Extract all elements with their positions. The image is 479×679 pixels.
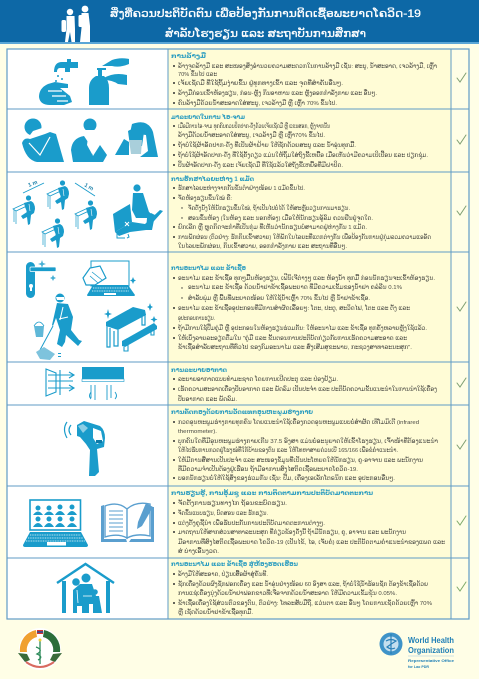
section text: distancing: ໃນໄລຍະພັກຜ່ອນ, ກິນເຂົ້າສວາຍ, ອອກກຳລັງກາຍ ແລະ ສະຖານທີ່ອື່ນໆ. (178, 242, 347, 250)
icon: laptop video meeting (23, 500, 88, 547)
section text: hand washing: ເຈ້ຍເຊັດມື ທີ່ໃຊ້ຖິ້ມງ່າຍຂຶ້ນ ຢູ່ທຸກທາງເຂົ້າ ແລະ ຈຸດທີ່ສຳຄັນອື່ນໆ. (178, 80, 343, 87)
section text: cough etiquette (171, 113, 428, 169)
section text: cough etiquette: ປິ້ນຜ້າອັດປາກ-ດັງ ແລະ ເຈ້ຍເຊັດມື ທີ່ໃຊ້ແລ້ວໃສ່ຖັງຂີ້ເຫຍື້ອທີ່ມີຝາປິດ. (178, 161, 343, 169)
icon: table and bench (104, 303, 158, 351)
section text: home: ການອະນາໄມ ແລະ ຂ້າເຊື້ອ ສູ່ຫ້ອງຮອດເຮືອນ (171, 559, 298, 569)
section text: ventilation (171, 367, 437, 403)
section text: screening: ໃຫ້ໄປຮັບການກວດຢູ່ໂຮງໝໍທີ່ໃກ້ບ້ານຂອງຕົນ ແລະ ໃຫ້ໂທຫາສາຍດ່ວນເບີ 165/166 ເພື່ອຂໍຄຳແນະນຳ. (178, 446, 398, 454)
panel: learning and monitoring (23, 488, 466, 555)
section text: home: ຊັກເຄື່ອງດ້ວຍຜົງຊັກຟອກເຄື່ອງ ແລະ ນ້ຳອຸ່ນຢ່າງໜ້ອຍ 60 ອົງສາ ແລະ, ຖ້າບໍ່ໃຊ້ນ້ຳຮ້ອນຊັກ ຕ້ອງຂ້າເຊື້ອດ້ວຍ (178, 581, 428, 588)
check mark (457, 206, 466, 215)
section text: distancing: ຈັດຕັ່ງນັ່ງໃຫ້ນັກຮຽນຂຶ້ນໃໝ່, ຖ້າເປັນໄປບໍ່ໄດ້ ໃຫ້ສະຫຼັບວຽນການມາຮຽນ. (188, 204, 350, 212)
icon: WHO emblem (380, 632, 402, 656)
section text: screening: ທີ່ມີຄວາມຈຳເປັນຕ້ອງຢູ່ເຮືອນ ຖ້າມີອາການສົງໄສຕິດເຊື້ອພະຍາດໂຄວິດ-19. (178, 465, 358, 473)
section text: screening: ກວດອຸນຫະພູມຮ່າງກາຍທຸກຄົນ ໂດຍແນະນຳໃຊ້ເຄື່ອງກວດອຸນຫະພູມແບບບໍ່ສຳຜັດ ເທີໂມມິເຕີ (infrared (178, 419, 419, 426)
section text: hand washing (171, 51, 437, 107)
panel: clean at home (57, 559, 466, 616)
section text: cough etiquette: ລ້າງມືດ້ວຍນ້ຳສະອາດໃສ່ສະບູ, ເຈວລ້າງມື ຫຼື ເຫຼົ້າ70% ຂຶ້ນໄປ. (178, 131, 325, 139)
panel: physical distancing (13, 174, 466, 250)
panel: cough and sneeze etiquette (22, 113, 466, 169)
WHO wordmark (408, 635, 454, 669)
section text: cleaning: ອຸປະກອນການຮຽນ. (178, 316, 215, 322)
section text: ventilation: ປັບອາກາດ ແລະ ພັດລົມ. (178, 395, 237, 403)
section text: learning: ຈັດຕັ້ງການຮຽນທາງໄກ ຖ້ອນຂະບົດຮຽນ. (178, 499, 287, 507)
section text: learning: ແຕ່ງຕັ້ງຄູຊີ້ນຳ ເພື່ອຮັບປະກັນການປະຕິບັດມາດຕະການຕ່າງໆ. (178, 520, 325, 527)
icon: coughing into elbow (22, 118, 64, 162)
section text: learning: ມີອາການທີ່ສົງໄສຕິດເຊື້ອພະຍາດ ໂຄວິດ-19 (ເປັນໄຂ້, ໄອ, ເຈັບຄໍ) ແລະ ປະຕິບັດຕາມຄຳແນະນຳຂອງແພດ ແລະ (178, 538, 445, 546)
check mark (457, 135, 466, 144)
section text: hand washing: ລ້າງຈຸດລ້າງມື ແລະ ສະໜອງສິ່ງອຳນວຍຄວາມສະດວກໃນການລ້າງມື ເຊັ່ນ: ສະບູ, ນ້ຳສະອາດ, ເຈວລ້າງມື, ເຫຼົ້າ (178, 63, 437, 70)
section text: distancing: ການພັກຜ່ອນ (ຕົວຢ່າງ: ຮັກກິນເຂົ້າສວາຍ) ໃຫ້ພັກໃນໄລຍະທີ່ແຕກຕ່າງກັນ ເພື່ອປ້ອງກັນການຢູ່ກຸ່ມລວມຄວາມແອອັດ (178, 233, 431, 241)
section text: distancing: ສອນຂຶ້ນຫ້ອງ (ໃນຫ້ອງ ແລະ ນອກຫ້ອງ) ເມື່ອໃຫ້ນັກຮຽນອູ້ລົມ ຄວນຢືນຢູ່ຈຸດໃດ. (188, 215, 373, 222)
icon: person on distanced bench (113, 184, 163, 238)
section text: cleaning: ຖ້າມີການໃຊ້ປື້ມຄູ່ມື ຫຼື ອຸປະກອນໃນຫ້ອງຮຽນຮ່ວມກັນ: ໃຫ້ອະນາໄມ ແລະ ຂ້າເຊື້ອ ທຸກຄັ້ງຫລາຍຫຼັງໃຊ້ແລ້ວ. (178, 324, 427, 332)
section text: home: ລ້າງມືໃຫ້ສະອາດ, ປ່ຽນເສື້ອຜ້າສູ່ຄັນທີ. (178, 571, 268, 578)
section text: cleaning: ໃຫ້ເບິ່ງລາຍລະອຽດຕື່ມໃນ "ຄູ່ມື ແລະ ຂັ້ນຕອນການປະຕິບັດກ່ຽວກັບການເຮັດຄວາມສະອາດ ແລະ (178, 335, 407, 342)
WHO wordmark: World Health (408, 635, 454, 645)
icon: spaced student desks: 1 m (28, 180, 39, 189)
section text: cleaning: ອະນາໄມ ແລະ ຂ້າເຊື້ອອຸປະກອນທີ່ມີການສຳຜັດເລື້ອຍໆ: ໂຕະ, ປະຕູ, ສະວິດໄຟ, ໂຕະ ແລະ ຕັ່ງ ແລະ (178, 304, 410, 312)
icon: spaced student desks: 1 m (83, 183, 94, 193)
section text: distancing: ຈັດຫ້ອງຮຽນຂຶ້ນໃໝ່ ຄື: (178, 195, 232, 202)
icon: person adjusting mask (115, 122, 158, 157)
check mark (457, 73, 466, 82)
logo: World Health Organization (380, 632, 454, 669)
section text: cleaning (171, 263, 435, 351)
icon: window vent with airflow (46, 369, 74, 396)
section text: cough etiquette: ມາລະຍາດໃນການ ໄອ-ຈາມ (171, 113, 245, 121)
check mark (457, 378, 466, 387)
panel: cleaning and disinfection (26, 260, 466, 360)
check mark (457, 582, 466, 591)
logo: Lao Ministry of Health emblem (18, 628, 62, 670)
section text: distancing: ຮັກສາໄລຍະຫ່າງຈາກກັນຂັ້ນຕ່ຳຢ່າງໜ້ອຍ 1 ແມັດຂຶ້ນໄປ. (178, 184, 305, 192)
WHO wordmark: for Lao PDR (408, 665, 429, 669)
icon: soap dispenser and hands (89, 58, 129, 105)
icon: air conditioner (82, 367, 124, 400)
icon: infrared thermometer (64, 421, 105, 476)
section text: ventilation: ລະບາຍອາກາດແບບທຳມະຊາດ ໂດຍການເປີດປະຕູ ແລະ ປ່ອງຢ້ຽມ. (178, 375, 338, 383)
section text: learning (171, 488, 445, 555)
section text: home: ການແຊ່ເຄື່ອງນຸ່ງດ້ວຍນ້ຳຢາຟອກຂາວທີ່ເຈືອຈາກດ້ວຍນ້ຳສະອາດ ໃຫ້ມີຄວາມເຂັ້ມຂຸ້ນ 0.05%. (178, 590, 397, 597)
section text: learning: ການຮຽນຮູ້, ການອຸ້ມຊູ ແລະ ການຕິດຕາມການປະຕິບັດມາດຕະການ (171, 488, 374, 499)
check mark (457, 302, 466, 311)
section text: home (171, 559, 432, 616)
section text: cleaning: ອະນາໄມ ແລະ ຂ້າເຊື້ອ ທຸກໆມື້ນຫ້ອງຮຽນ, ເຟີນິເຈີຕ່າງໆ ແລະ ຫ້ອງນ້ຳ ທຸກມື້ ກ່ອນນັກຮຽນຈະເຂົ້າຫ້ອງຮຽນ. (178, 274, 435, 282)
section text: learning: ມາດຖານໃຫ້ສາກສ່ວນສາທາລະນະສຸກ ທີ່ກ່ຽວຂ້ອງດັ່ງນີ້ ຖ້າມີນັກຮຽນ, ຄູ, ອາຈານ ແລະ ພະນັກງານ (178, 529, 406, 536)
icon: family in house (57, 564, 114, 613)
title (110, 7, 421, 40)
section text: screening: ໃຫ້ມີການສື່ສານເປັນປະຈຳ ແລະ ສະໜອງຂໍ້ມູນທີ່ເປັນປະໂຫຍດໃຫ້ນັກຮຽນ, ຄູ-ອາຈານ ແລະ ພະນັກງານ (178, 456, 423, 464)
icon: person mopping floor (34, 294, 82, 360)
icon: tap and washing hands (39, 59, 78, 105)
section text: home: ຂ້າເຊື້ອເຄື່ອງໃຊ້ສ່ວນຕົວຂອງຕົນ, ຕົວຢ່າງ: ໂທລະສັບມືຖື, ແວ່ນຕາ ແລະ ອື່ນໆ ໂດຍການເຊັດດ້ວຍເຫຼົ້າ 70% (178, 600, 432, 607)
panel: temperature screening (64, 407, 466, 482)
section text: hand washing: ຄົນລ້າງມືດ້ວຍນ້ຳສະອາດໃສ່ສະບູ, ເຈວລ້າງມື ຫຼື ເຫຼົ້າ 70% ຂຶ້ນໄປ. (178, 99, 337, 107)
section text: screening: thermometer). (178, 429, 217, 435)
WHO wordmark: Organization (408, 645, 454, 655)
title: ສິ່ງທີ່ຄວນປະຕິບັດຕົນ ເພື່ອປ້ອງກັນການຕິດເຊື້ອພະຍາດໂຄວິດ-19 (110, 7, 421, 20)
icon: open book and pencil (101, 503, 154, 542)
section text: cough etiquette: ຖ້າບໍ່ໃຊ້ຜ້າອັດປາກ-ດັງ ທີ່ໃຊ້ຄັ້ງດຽວ ແມ່ນໃຫ້ຖິ້ມໃສ່ຖົງຂີ້ເຫຍື້ອ ເມື່ອເຫັນວ່າມີຄວາມເປິເປື້ອນ ແລະ ປຽກຊຸ່ມ. (178, 151, 428, 160)
section text: screening: ການຄັດກອງດ້ວຍການວັດແທກອຸນຫະພູມຮ່າງກາຍ (171, 407, 313, 417)
section text: cough etiquette: ເມື່ອມີການໄອ-ຈາມ ທຸກຄົນຄວນປິດປາກ-ດັງດ້ວຍເຈ້ຍເຊັດມື ຫຼື ແຂນສອກ, ຫຼັງຈາກນັ້ນ (178, 122, 330, 130)
section text: hand washing: ລ້າງມືກ່ອນເຂົ້າຫ້ອງຮຽນ, ກ່ອນ-ຫຼັງ ກິນອາຫານ ແລະ ຫຼັງອອກກຳລັງກາຍ ແລະ ອື່ນໆ. (178, 90, 377, 97)
WHO wordmark: Representative Office (408, 659, 454, 663)
panel: ventilation (46, 367, 466, 403)
section text: distancing (171, 174, 431, 250)
section text: cleaning: ຂ້າເຊື້ອສຳລັບສະຖານທີ່ທົ່ວໄປ ຂອງກົມອະນາໄມ ແລະ ສົ່ງເສີມສຸຂະພາບ, ກະຊວງສາທາລະນະສຸກ". (178, 343, 412, 351)
section text: screening: ບຸກຄົນໃດທີ່ມີອຸນຫະພູມຮ່າງກາຍເກີນ 37.5 ອົງສາ ແມ່ນບໍ່ອະນຸຍາດໃຫ້ເຂົ້າໂຮງຮຽນ, ເຈົ້າໜ້າທີ່ຕ້ອງແນະນຳ (178, 438, 438, 445)
section text: distancing: ການຮັກສາໄລຍະຫ່າງ 1 ແມັດ (171, 174, 254, 183)
section text: learning: ສ່ ບ່າງເອື້ນງວດ. (178, 548, 219, 555)
section text: cough etiquette: ຖ້າບໍ່ໃຊ້ຜ້າອັດປາກ-ດັງ ທີ່ເປັນຜ້າຝ້າຍ ໃຫ້ຊັກດ້ວຍສະບູ ແລະ ນ້ຳອຸ່ນທຸກມື້. (178, 141, 356, 149)
icon: students with backpacks (62, 6, 90, 42)
title: ສຳລັບໂຮງຮຽນ ແລະ ສະຖາບັນການສຶກສາ (165, 27, 366, 40)
check mark (457, 440, 466, 449)
icon: covering face with tissue (71, 118, 107, 162)
header banner (0, 0, 479, 44)
icon: wiping laptop (83, 261, 136, 296)
check mark (457, 516, 466, 525)
section text: screening: ບອກນັກຮຽນບໍ່ໃຫ້ໃຊ້ສິ່ງຂອງຮ່ວມກັນ ເຊັ່ນ: ປື້ມ, ເຄື່ອງເອເລັກໂຕຣນິກ ແລະ ອຸປະກອນອື່ນໆ. (178, 474, 395, 482)
section text: ventilation: ການລະບາຍອາກາດ (171, 367, 227, 374)
section text: learning: ຈັດຂຶ້ນແບບຮຽນ, ບົດສອນ ແລະ ຮັກຮຽນ. (178, 510, 268, 517)
panel: hand washing (39, 51, 466, 107)
section text: cleaning: ສຳລັບພຸ່ມ ຫຼື ພື້ນທີ່ພະຍາດໜ້ອຍ ໃຫ້ໃຊ້ນ້ຳເຫຼົ້າ 70% ຂຶ້ນໄປ ຫຼື ນ້ຳຢາຂ້າເຊື້ອ. (188, 294, 370, 302)
section text: hand washing: ການລ້າງມື (171, 51, 207, 60)
icon: door handle (26, 260, 56, 298)
section text: hand washing: 70% ຂຶ້ນໄປ ແລະ (178, 70, 217, 78)
section text: home: ຫຼື ເຊັດດ້ວຍນ້ຳຢາຂ້າເຊື້ອທຸກມື້. (178, 609, 253, 616)
section text: distancing: ຍົກເລີກ ຫຼື ຫຼຸດກິດຈະກຳທີ່ເປັນກຸ່ມ ທີ່ເຫັນວ່ານັກຮຽນບໍ່ສາມາດຢູ່ຫ່າງກັນ 1 ແມັດ. (178, 223, 367, 231)
section text: screening (171, 407, 438, 482)
icon: spaced student desks (13, 180, 97, 248)
section text: ventilation: ເຮັດຄວາມສະອາດເຄື່ອງປັບອາກາດ ແລະ ພັດລົມ ເປັນປະຈຳ ແລະ ປະຕິບັດຄວາມຂັ້ນແນະນຳໃນການນຳໃຊ້ເຄື່ອງ (178, 385, 437, 393)
section text: cleaning: ອະນາໄມ ແລະ ຂ້າເຊື້ອ ດ້ວຍນ້ຳຢາຂ້າເຊື້ອພະຍາດ ທີ່ມີຄວາມເຂັ້ມຂອງນ້ຳຢາ ຄລໍລີນ 0.1% (188, 283, 402, 291)
section text: cleaning: ການອະນາໄມ ແລະ ຂ້າເຊື້ອ (171, 263, 246, 272)
